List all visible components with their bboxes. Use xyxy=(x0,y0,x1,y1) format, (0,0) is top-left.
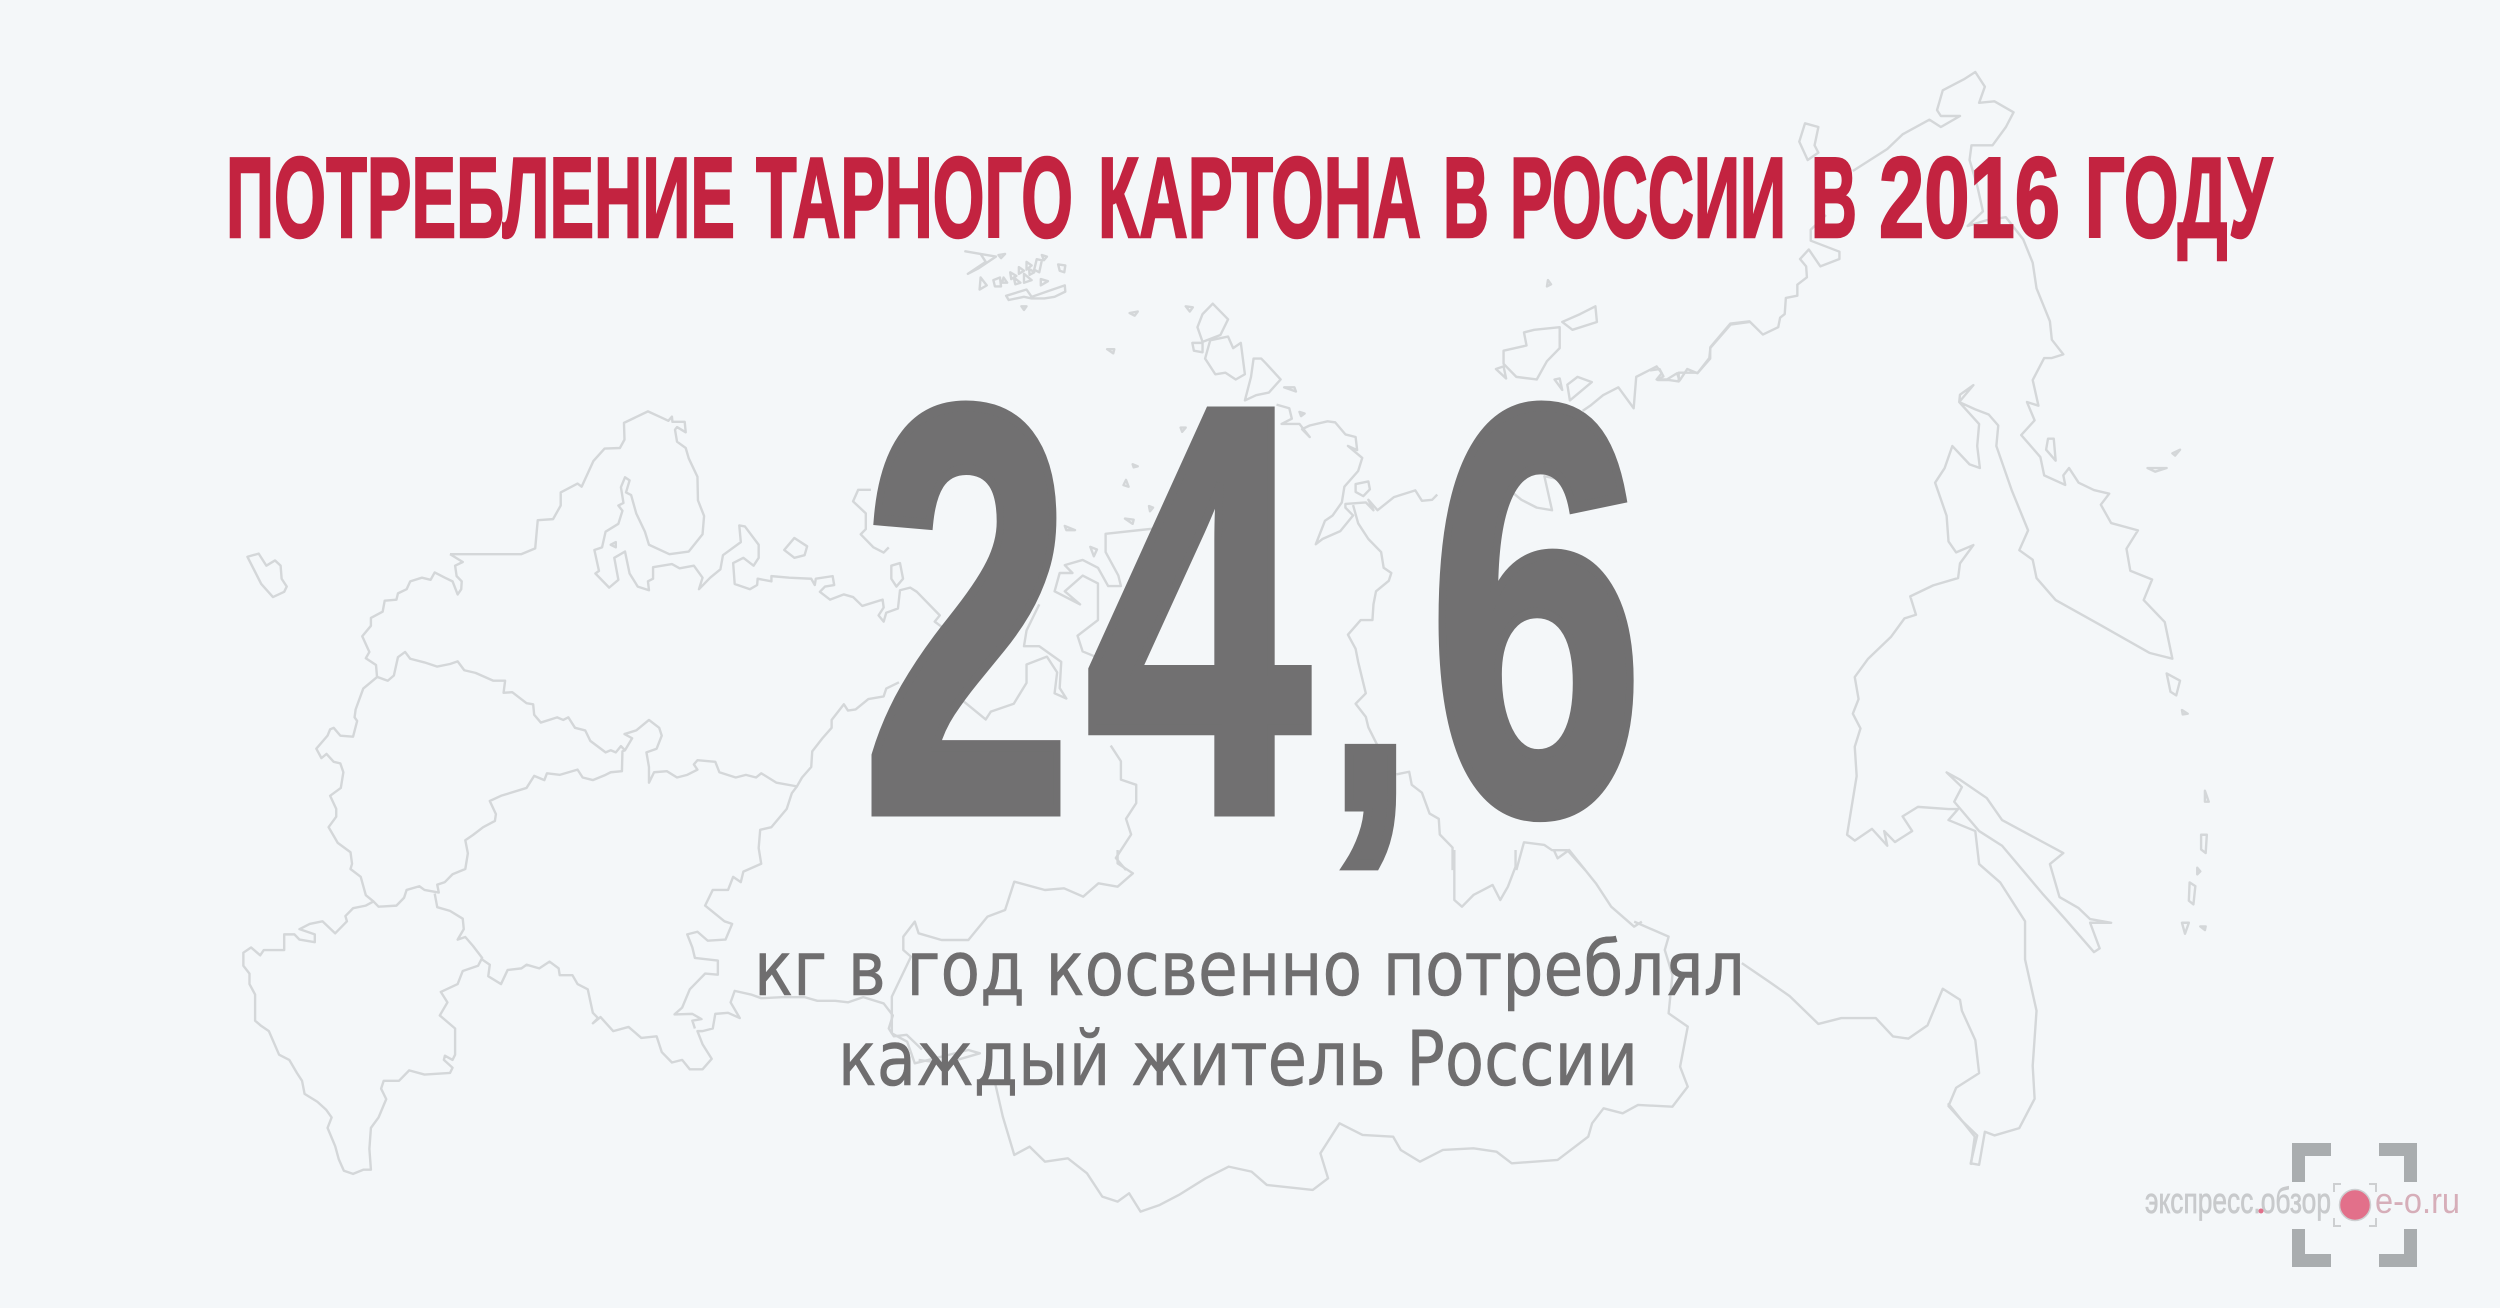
title xyxy=(226,135,2273,262)
logo xyxy=(2145,1143,2460,1267)
subtitle: каждый житель России xyxy=(838,1014,1638,1103)
title: В xyxy=(1811,135,1857,262)
title: В xyxy=(1443,135,1489,262)
big number: 2 xyxy=(862,286,1072,934)
big number: 4 xyxy=(1086,286,1313,934)
title: ПОТРЕБЛЕНИЕ xyxy=(226,135,735,262)
subtitle: кг в год косвенно потреблял xyxy=(754,924,1745,1013)
title: ТАРНОГО xyxy=(756,135,1073,262)
title: КАРТОНА xyxy=(1098,135,1421,262)
logo: e-o.ru xyxy=(2375,1180,2460,1221)
subtitle xyxy=(754,924,1745,1103)
background map of Russia xyxy=(243,72,2209,1212)
title: ГОДУ xyxy=(2085,135,2273,262)
big number xyxy=(862,286,1644,934)
big number: 6 xyxy=(1428,286,1644,934)
logo: экспресс.обзор xyxy=(2145,1180,2331,1221)
title: 2016 xyxy=(1879,135,2060,262)
title: РОССИИ xyxy=(1510,135,1786,262)
big number: , xyxy=(1328,462,1412,887)
